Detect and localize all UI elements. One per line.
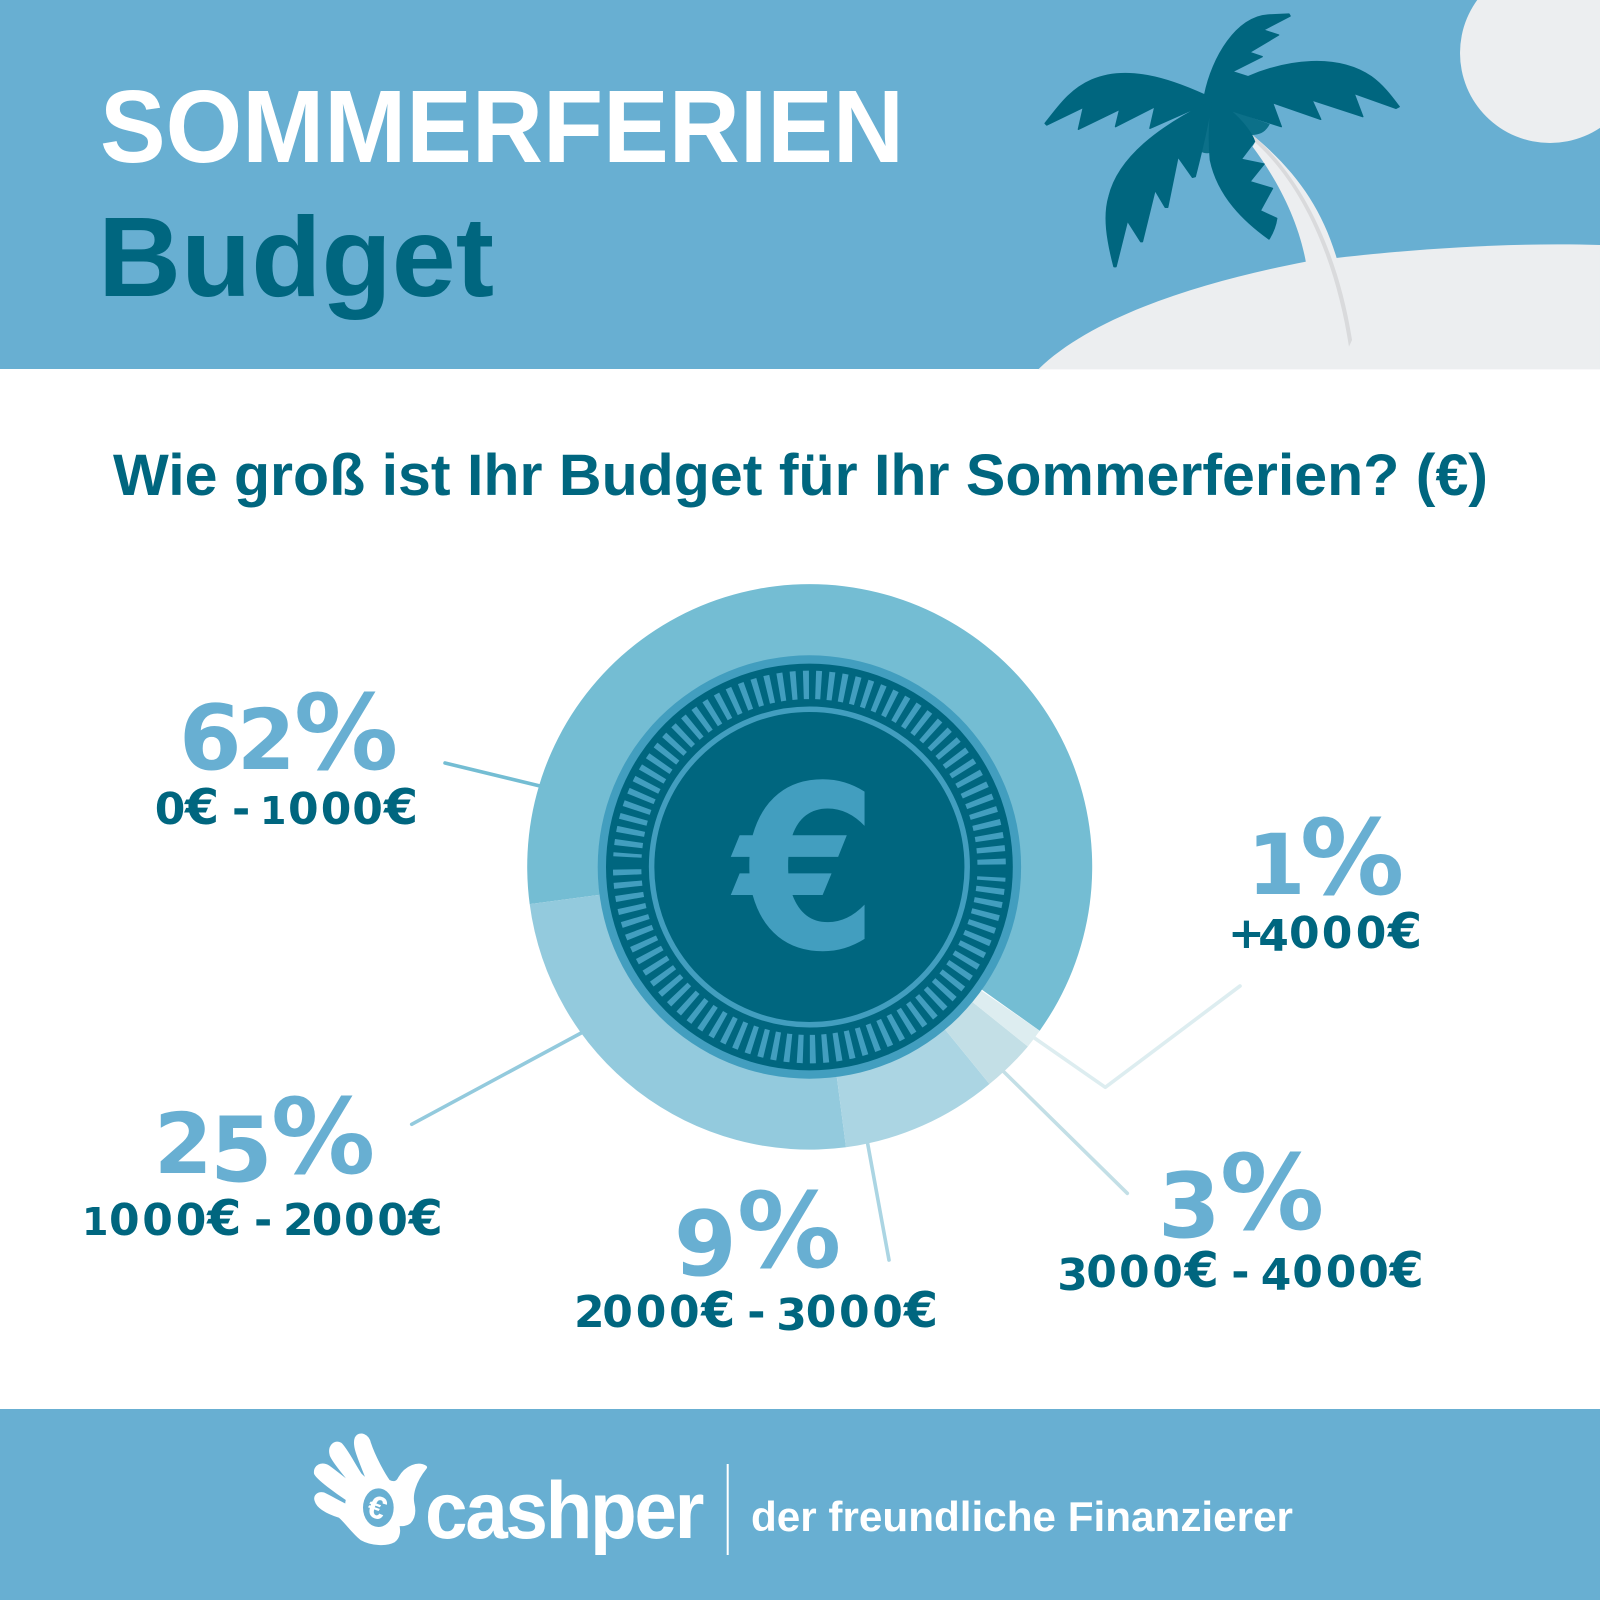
label: 62 percent: € <box>184 779 219 836</box>
label: 1 percent: 000 <box>1289 908 1386 959</box>
label: 9 percent: 9 <box>674 1192 737 1297</box>
label: 25 percent: 000 <box>109 1195 206 1246</box>
label: 1 percent: + <box>1228 908 1265 959</box>
segment: 3 percent <box>930 992 1028 1084</box>
label: 3 percent: € <box>1184 1242 1219 1299</box>
label: 62 percent <box>155 672 418 836</box>
label: 3 percent: 000 <box>1086 1247 1183 1298</box>
label: 62 percent: 1 <box>260 789 286 833</box>
label: 3 percent: 3 <box>1057 1250 1088 1301</box>
label: 62 percent: 6 <box>179 686 242 791</box>
label: 62 percent: € <box>383 779 418 836</box>
label: 3 percent <box>1057 1132 1424 1301</box>
segment: 9 percent <box>809 867 990 1147</box>
icon: euro coin: € <box>730 738 878 1002</box>
label: 9 percent: % <box>737 1170 841 1292</box>
label: 1 percent: 4 <box>1258 911 1289 962</box>
footer banner <box>0 1409 1600 1600</box>
label: 1 percent: % <box>1300 797 1404 919</box>
label: 9 percent: € <box>903 1282 938 1339</box>
label: 62 percent: - <box>232 784 250 835</box>
label: 9 percent: 000 <box>602 1287 700 1338</box>
label: 3 percent: 4 <box>1261 1250 1291 1301</box>
tagline: der freundliche Finanzierer <box>751 1493 1293 1540</box>
label: 3 percent: % <box>1220 1132 1324 1254</box>
segment: 1 percent <box>960 983 1040 1046</box>
label: 9 percent: - <box>747 1287 766 1338</box>
label: 25 percent: % <box>271 1076 375 1198</box>
label: 9 percent: 3 <box>776 1290 807 1341</box>
label: 9 percent <box>574 1170 938 1341</box>
label: 25 percent: 2 <box>154 1095 212 1193</box>
label: 62 percent: % <box>294 672 398 794</box>
label: 62 percent: 0 <box>155 784 185 835</box>
icon: hand logo: € <box>363 1487 392 1527</box>
label: 25 percent: 000 <box>312 1195 408 1246</box>
donut chart <box>527 584 1092 1150</box>
label: 1 percent: € <box>1387 903 1422 960</box>
label: 25 percent <box>82 1076 443 1247</box>
icon: euro coin <box>598 655 1021 1079</box>
leader lines <box>412 763 1240 1260</box>
icon: island and palm tree <box>1038 14 1600 369</box>
icon: sun <box>1460 0 1600 143</box>
label: 25 percent: 1 <box>82 1200 108 1244</box>
logo wordmark: cashper: cashper <box>425 1466 704 1556</box>
label: 25 percent: 2 <box>283 1195 314 1246</box>
label: 62 percent: 000 <box>288 784 383 835</box>
label: 1 percent <box>1228 797 1422 962</box>
label: 3 percent: - <box>1231 1247 1250 1298</box>
label: 3 percent: 3 <box>1158 1154 1221 1259</box>
label: 3 percent: 000 <box>1292 1247 1389 1298</box>
label: 9 percent: € <box>700 1282 735 1339</box>
question heading: Wie groß ist Ihr Budget für Ihr Sommerferien? (€) <box>113 443 1488 508</box>
label: 9 percent: 000 <box>806 1287 903 1338</box>
label: 3 percent: € <box>1389 1242 1424 1299</box>
label: 25 percent: 5 <box>210 1098 273 1203</box>
segment: 25 percent <box>530 867 846 1150</box>
label: 25 percent: € <box>206 1190 241 1247</box>
label: 25 percent: - <box>254 1195 272 1246</box>
title: Sommerferien: SOMMERFERIEN <box>100 69 904 184</box>
label: 9 percent: 2 <box>574 1287 605 1338</box>
icon: hand logo <box>316 1435 425 1543</box>
segment: 62 percent <box>527 584 1092 1031</box>
label: 1 percent: 1 <box>1247 816 1305 914</box>
label: 62 percent: 2 <box>237 691 295 789</box>
label: 25 percent: € <box>408 1190 443 1247</box>
header banner <box>0 0 1600 369</box>
title: Budget: Budget <box>98 194 494 320</box>
